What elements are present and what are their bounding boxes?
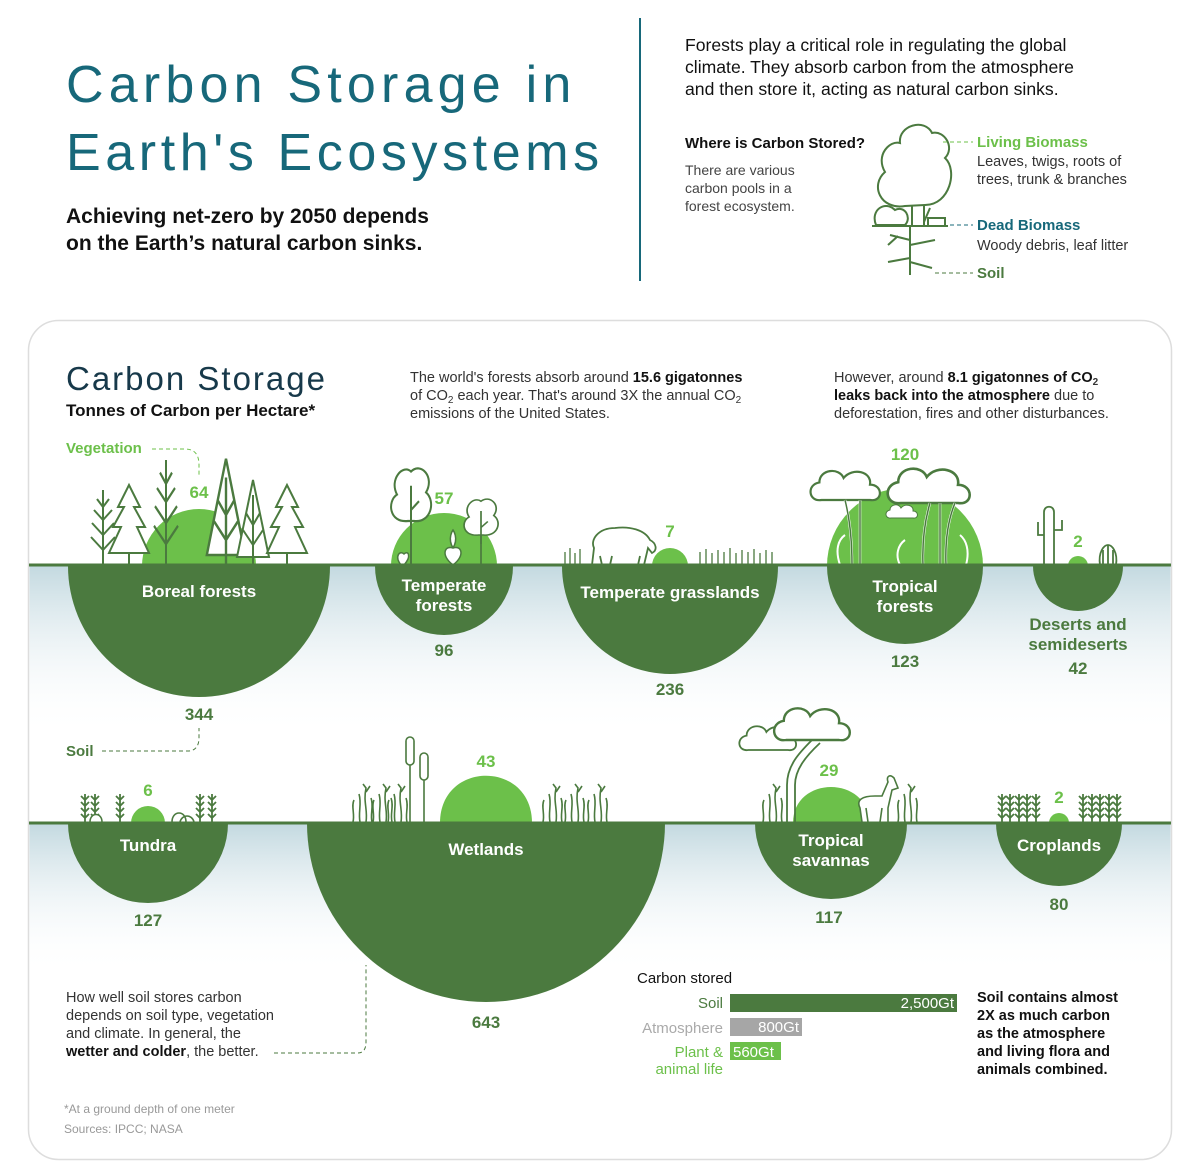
bar chart: carbon stored: Atmosphere [642,1020,723,1037]
names row 1 [142,576,938,616]
callout: vegetation [66,440,199,476]
icons: cacti [1038,507,1116,565]
panel: carbon storage: 643 [472,1013,500,1032]
where is carbon stored: Where is Carbon Stored? [685,135,865,152]
names row 2: savannas [792,851,870,870]
icons: crops [998,794,1121,822]
names row 1: Temperate grasslands [580,583,760,602]
panel: carbon storage: 123 [891,652,919,671]
heading: carbon storage [66,360,327,420]
vegetation domes row 2 [131,776,1069,823]
bar chart: carbon stored: 2,500Gt [901,995,955,1012]
where is carbon stored: carbon pools in a [685,180,792,196]
values row 2: 29 [820,761,838,780]
title: Earth's Ecosystems [66,124,604,182]
subtitle: on the Earth’s natural carbon sinks. [66,232,422,255]
title [66,56,604,182]
names row 1: forests [877,597,933,616]
values row 1 [190,445,1083,551]
text block: soil storage: wetter and colder, the better. [65,1044,259,1060]
labels: carbon pools: trees, trunk & branches [977,172,1127,188]
callout: soil vs atmosphere: 2X as much carbon [977,1008,1110,1024]
labels: carbon pools: Dead Biomass [977,217,1080,234]
title: Carbon Storage in [66,56,576,114]
icons: savanna tree and antelope [739,708,917,822]
panel: carbon storage [28,320,1172,1160]
heading: carbon storage: Carbon Storage [66,360,327,397]
intro text: and then store it, acting as natural carbon sinks. [685,79,1059,99]
labels: carbon pools: Leaves, twigs, roots of [977,154,1122,170]
values row 1: 57 [435,489,453,508]
bar chart: carbon stored [637,970,957,1078]
icons: temperate trees [391,468,498,565]
values row 1: 7 [665,522,675,541]
soil semicircles row 1 [68,566,1123,697]
panel: carbon storage: 80 [1050,895,1068,914]
panel: carbon storage: 42 [1069,659,1087,678]
names row 2 [120,831,1101,870]
text block: leakage: 2 [1093,377,1099,388]
text block: absorption: 2 [736,395,742,406]
values row 1: 2 [1073,532,1083,551]
icons: grassland and bison [565,528,772,565]
bar chart: carbon stored: 560Gt [733,1044,775,1061]
names row 2: Wetlands [448,840,524,859]
footnote and sources [64,1102,235,1136]
vegetation green domes row 1 [142,488,1088,566]
callout: soil: Soil [66,743,94,760]
labels: carbon pools: Woody debris, leaf litter [977,238,1128,254]
labels: carbon pools: Living Biomass [977,134,1088,151]
values row 2: 2 [1054,788,1064,807]
values row 2: 43 [477,752,495,771]
callout: soil vs atmosphere: animals combined. [977,1062,1108,1078]
text block: leakage: leaks back into the atmosphere due to [834,388,1094,404]
text block: soil storage: and climate. In general, the [66,1026,241,1042]
names row 2: Tropical [798,831,864,850]
text block: absorption: of CO [410,388,448,404]
values row 1: 120 [891,445,919,464]
callout: soil vs atmosphere: as the atmosphere [977,1026,1105,1042]
callout: soil vs atmosphere: Soil contains almost [977,990,1118,1006]
names row 1: Temperate [402,576,486,595]
bar chart: carbon stored: Soil [698,995,723,1012]
text block: absorption [410,370,742,422]
values row 1: 64 [190,483,209,502]
intro text [685,35,1074,99]
footnote and sources: Sources: IPCC; NASA [64,1122,183,1136]
soil semicircles row 2 [68,823,1122,1002]
names row 2: Croplands [1017,836,1101,855]
names row 1: Boreal forests [142,582,256,601]
text block: leakage [834,370,1109,422]
bar chart: carbon stored: animal life [655,1061,723,1078]
panel: carbon storage: 127 [134,911,162,930]
names row 1: Tropical [872,577,938,596]
labels: carbon pools: Soil [977,265,1005,282]
bar chart: carbon stored: Carbon stored [637,970,732,987]
panel: carbon storage: 96 [435,641,453,660]
intro text: Forests play a critical role in regulating the global [685,35,1066,55]
icons: tundra plants [81,794,216,822]
text block: leakage: However, around 8.1 gigatonnes of CO [834,370,1093,386]
footnote and sources: *At a ground depth of one meter [64,1102,235,1116]
heading: carbon storage: Tonnes of Carbon per Hectare* [66,401,315,420]
text block: leakage: deforestation, fires and other disturbances. [834,406,1109,422]
callout: vegetation: Vegetation [66,440,142,457]
text block: soil storage [65,965,366,1060]
text block: absorption: each year. That's around 3X the annual CO [453,388,736,404]
text block: absorption: The world's forests absorb around 15.6 gigatonnes [410,370,742,386]
subtitle: Achieving net-zero by 2050 depends [66,205,429,228]
where is carbon stored [685,135,865,214]
text block: soil storage: depends on soil type, vegetation [66,1008,274,1024]
intro text: climate. They absorb carbon from the atmosphere [685,57,1074,77]
callout: soil [66,728,199,760]
panel: carbon storage: Deserts and [1029,615,1127,634]
icon: forest tree with roots [872,125,951,275]
icons: tropical trees [811,469,970,565]
where is carbon stored: forest ecosystem. [685,198,795,214]
values row 2 [143,752,1064,807]
names row 2: Tundra [120,836,177,855]
panel: carbon storage: 236 [656,680,684,699]
bar chart: carbon stored: 800Gt [758,1019,800,1036]
subtitle [66,205,429,255]
callout: soil vs atmosphere [977,990,1118,1078]
callout: soil vs atmosphere: and living flora and [977,1044,1110,1060]
text block: absorption: 2 [448,395,454,406]
text block: absorption: emissions of the United States. [410,406,610,422]
panel: carbon storage: semideserts [1028,635,1128,654]
panel: carbon storage: 344 [185,705,214,724]
text block: soil storage: How well soil stores carbon [66,990,242,1006]
icons: boreal trees [91,459,307,565]
icons: wetland reeds [353,737,607,822]
where is carbon stored: There are various [685,162,795,178]
bar chart: carbon stored: Plant & [675,1044,723,1061]
names row 1: forests [416,596,472,615]
labels: carbon pools [935,134,1128,282]
panel: carbon storage: 117 [815,908,843,927]
values row 2: 6 [143,781,153,800]
